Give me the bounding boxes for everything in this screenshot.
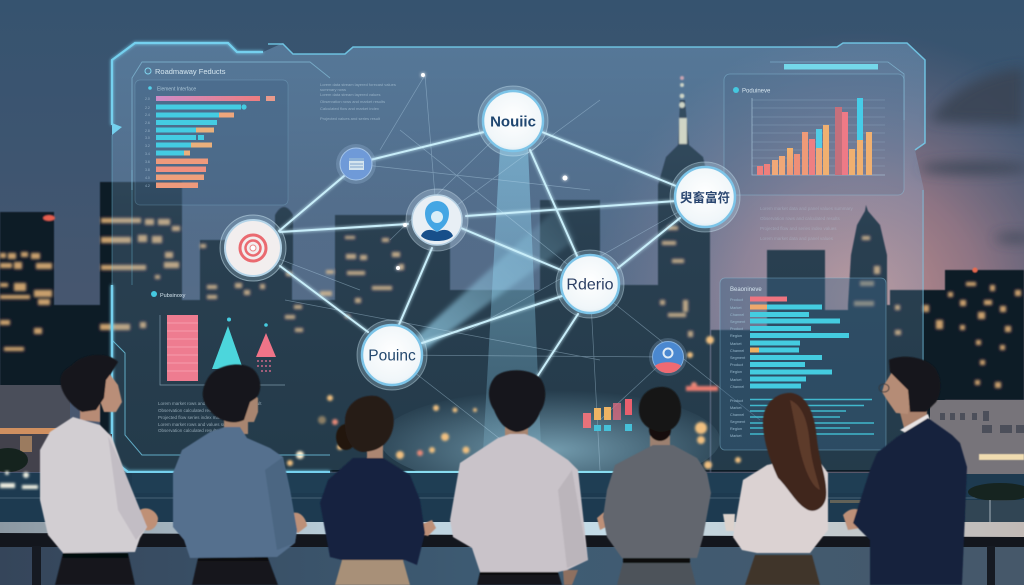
bar axis labels: 3.8 <box>145 168 150 172</box>
person 4 <box>450 370 588 585</box>
panel: bottom-left mixed chart <box>151 291 285 433</box>
person 2 <box>173 364 307 585</box>
chart text block: Observation calculated results panel values <box>158 408 246 413</box>
dark clouds <box>920 68 1024 242</box>
person 5 <box>597 387 711 585</box>
row labels: Market <box>730 378 743 382</box>
bar axis labels: 3.0 <box>145 136 150 140</box>
bar axis labels: 3.6 <box>145 160 150 164</box>
chart text block: Observation calculated results panel <box>158 428 231 433</box>
person 7 <box>843 357 967 585</box>
node: Chinese label: 臾畜富符 <box>680 190 730 205</box>
panel subheading: Element Interface <box>157 86 196 92</box>
row labels: Market <box>730 342 743 346</box>
foreground: waterfront band and distant buildings <box>0 385 1024 528</box>
bar axis labels: 2.0 <box>145 97 150 101</box>
row labels: Channel <box>730 313 744 317</box>
chart text block: Projected flow and series index values <box>760 226 837 231</box>
central light beams <box>380 148 720 490</box>
bar chart <box>156 96 275 188</box>
city skyline <box>0 76 1024 472</box>
row labels: Market <box>730 306 743 310</box>
node: target icon <box>220 215 286 281</box>
notes text block <box>320 82 396 121</box>
lit windows <box>0 218 1021 388</box>
row labels: Segment <box>730 320 746 324</box>
chart heading <box>151 291 186 299</box>
chart text block <box>158 401 262 433</box>
cyan triangle <box>212 318 243 369</box>
bar chart <box>750 296 849 388</box>
bar axis labels: 3.2 <box>145 144 150 148</box>
panel: top-left product bars <box>132 62 396 205</box>
bar axis labels: 2.8 <box>145 129 150 133</box>
notes text block: Projected values and series result <box>320 116 381 121</box>
node: Pouinc: Pouinc <box>368 348 416 364</box>
chart heading: Poduineve <box>742 88 771 94</box>
network nodes <box>220 73 740 390</box>
node: small user icon <box>649 338 687 376</box>
row labels: Channel <box>730 413 744 417</box>
network connection lines <box>279 132 680 380</box>
row labels: Region <box>730 427 742 431</box>
row labels: Market <box>730 434 743 438</box>
table <box>0 522 1024 585</box>
node: person icon <box>406 189 468 251</box>
bar axis labels: 3.4 <box>145 152 150 156</box>
chart heading: Beaonineve <box>730 287 762 293</box>
chart text block: Projected flow series index market rows <box>158 415 238 420</box>
node: Rderio <box>556 250 624 318</box>
buildings <box>0 100 1024 472</box>
bar axis labels: 2.2 <box>145 106 150 110</box>
node: Rderio: Rderio <box>566 276 614 294</box>
row labels: Product <box>730 298 744 302</box>
panel frame <box>112 43 925 475</box>
row labels: Product <box>730 327 744 331</box>
row labels: Product <box>730 363 744 367</box>
floor <box>0 545 1024 585</box>
notes text block: Calculated flow and market index <box>320 106 379 111</box>
bokeh lights <box>287 336 741 469</box>
chart text block: Lorem market data and panel values <box>760 236 834 241</box>
notes text block: Observation rows and market results <box>320 99 385 104</box>
bar axis labels: 4.0 <box>145 176 150 180</box>
panel: top-right column chart <box>724 62 904 241</box>
row labels: Channel <box>730 385 744 389</box>
notes text block: Lorem data stream layered values <box>320 92 380 97</box>
notes text block: Lorem data stream layered forecast values <box>320 82 396 87</box>
chart text block: Observation rows and calculated results <box>760 216 841 221</box>
hologram panel surface <box>112 43 925 470</box>
node: Nouiic <box>478 86 548 156</box>
chart text block: Lorem market data and panel values summary <box>760 206 854 211</box>
panel heading: Roadmaway Feducts <box>155 67 226 76</box>
node: Nouiic: Nouiic <box>490 114 536 130</box>
person 1 <box>40 355 158 585</box>
node: small document icon <box>336 144 376 184</box>
person 6 <box>723 393 828 585</box>
thin bars <box>750 400 874 434</box>
row labels: Market <box>730 406 743 410</box>
bar axis labels: 2.4 <box>145 113 150 117</box>
row labels: Segment <box>730 420 746 424</box>
node: Pouinc <box>357 320 427 390</box>
tower spire lights <box>679 76 687 144</box>
chart text block <box>760 206 854 241</box>
row labels: Segment <box>730 356 746 360</box>
person 3 <box>320 396 436 585</box>
glowing junction dots <box>396 73 568 270</box>
node: Chinese label <box>670 162 740 232</box>
chart text block: Lorem market rows and values summary <box>158 422 240 427</box>
row labels <box>730 298 746 438</box>
column chart <box>752 98 885 175</box>
stacked pink block <box>167 315 198 381</box>
bar axis labels <box>145 97 150 188</box>
notes text block: summary rows <box>320 87 346 92</box>
chart heading: Pubsinoxy <box>160 293 186 299</box>
left distant building <box>0 385 112 489</box>
chart text block: Lorem market rows and values summary data result <box>158 401 262 406</box>
bar axis labels: 2.6 <box>145 121 150 125</box>
right distant building <box>930 400 1024 525</box>
chart heading <box>733 87 771 94</box>
mini bars: lower centre panel <box>583 399 632 431</box>
bar axis labels: 4.2 <box>145 184 150 188</box>
thin background network lines <box>253 75 760 470</box>
row labels: Product <box>730 399 744 403</box>
row labels: Region <box>730 370 742 374</box>
pink triangle <box>256 323 276 372</box>
panel: bottom-right horizontal bars <box>720 278 886 450</box>
row labels: Region <box>730 334 742 338</box>
row labels: Channel <box>730 349 744 353</box>
